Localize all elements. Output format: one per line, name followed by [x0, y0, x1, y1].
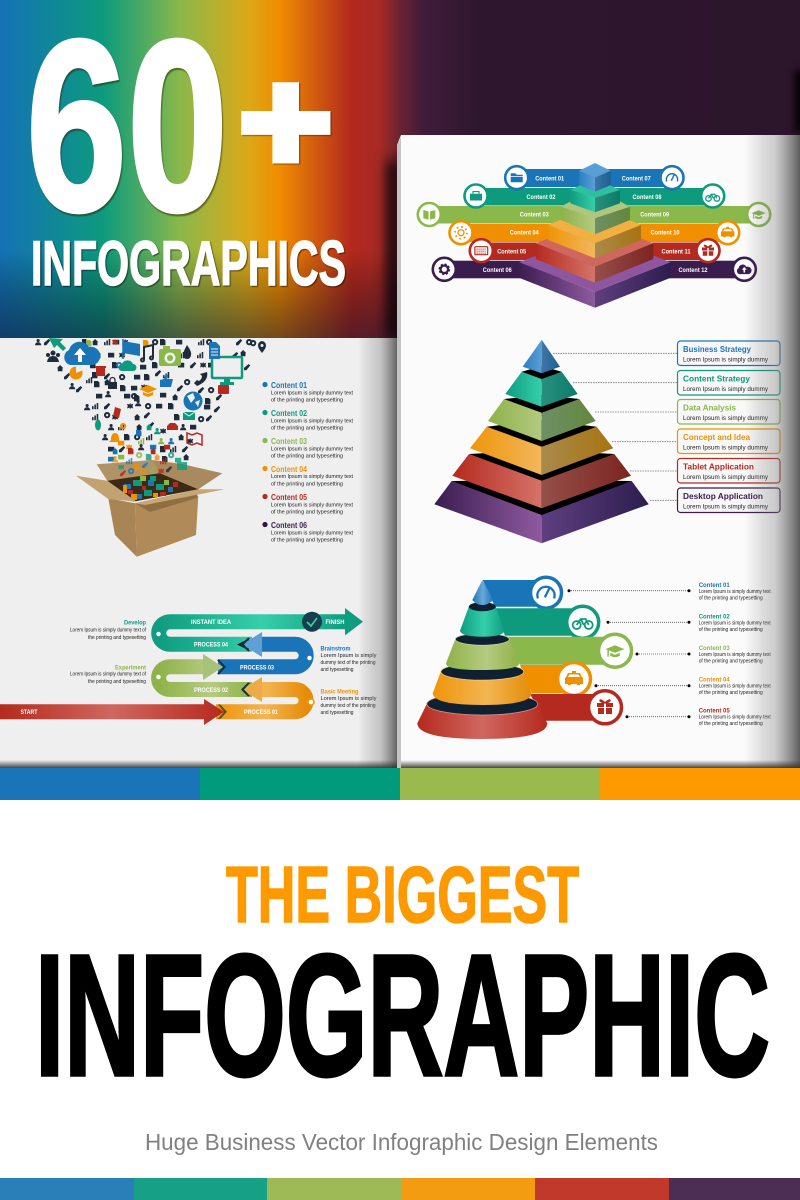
text: experiment: Lorem Ipsum is simply dummy text of — [70, 672, 147, 678]
icon: flag — [123, 339, 140, 359]
icon: book — [113, 407, 121, 418]
label: business strategy: Lorem Ipsum is simply dummy — [683, 356, 769, 364]
icon: phone — [194, 372, 207, 386]
text: experiment: the printing and typesetting — [88, 679, 146, 685]
text: brainstrom: and typesetting — [320, 667, 354, 673]
text: basic meeting: and typesetting — [320, 710, 354, 716]
legend item 04: Content 04 — [271, 465, 307, 474]
badge band: green — [505, 634, 632, 667]
band labels — [483, 176, 708, 274]
label: desktop application: Desktop Application — [683, 491, 763, 501]
heading: plus: + — [239, 41, 332, 202]
icon: gift — [95, 366, 106, 376]
cone layer: teal — [460, 602, 504, 637]
legend item 01: Content 01 — [271, 381, 307, 390]
badge band: red — [530, 691, 622, 724]
label: business strategy: Business Strategy — [683, 344, 751, 354]
panel: header gradient — [0, 0, 800, 340]
legend item 05: of the printing and typesetting — [271, 510, 343, 516]
text: basic meeting: dummy text of the printing — [320, 703, 376, 709]
text: cone content 03: of the printing and typesetting — [699, 658, 763, 664]
bands and icon badges left and right — [418, 166, 770, 281]
legend item 03: of the printing and typesetting — [271, 454, 343, 460]
subtitle: Huge Business Vector Infographic Design Elements — [145, 1129, 658, 1155]
label: tablet application — [678, 458, 780, 483]
legend item 02 — [262, 409, 353, 432]
color bar: bottom — [0, 1178, 800, 1200]
pyramid layer: red — [452, 454, 631, 508]
flow labels: PROCESS 02 — [194, 687, 228, 694]
legend item 04: of the printing and typesetting — [271, 482, 343, 488]
flow band: start red arrow — [0, 699, 224, 725]
flow labels — [20, 619, 345, 716]
text: experiment — [70, 664, 147, 685]
icon: drop — [183, 345, 191, 359]
label: data analysis — [678, 400, 780, 424]
icon: camera — [159, 346, 181, 366]
label: desktop application: Lorem Ipsum is simply dummy — [683, 504, 769, 510]
text: brainstrom: Lorem Ipsum is simply — [320, 653, 377, 659]
flow band: meeting orange — [216, 677, 306, 712]
icon: map — [187, 433, 202, 445]
legend item 04 — [262, 465, 353, 488]
flow band: develop teal — [159, 608, 363, 644]
icon: car — [167, 423, 178, 430]
icon cloud funnel — [35, 338, 266, 462]
legend item 06 — [262, 521, 353, 544]
label: concept and idea — [678, 429, 780, 454]
step layer: blue cube — [579, 163, 611, 192]
legend item 06: of the printing and typesetting — [271, 538, 343, 544]
text: cone content 05: Lorem Ipsum is simply dummy text — [699, 714, 771, 720]
legend item 02: Lorem Ipsum is simply dummy text — [271, 418, 353, 424]
text: cone content 02 — [699, 614, 771, 633]
label: business strategy — [678, 341, 780, 366]
band labels: Content 09 — [640, 212, 670, 218]
flow band: brainstorm blue — [218, 632, 306, 667]
icon: small cloud — [118, 360, 136, 371]
text: brainstrom — [320, 646, 377, 673]
label: concept and idea: Concept and Idea — [683, 432, 750, 442]
text: develop: the printing and typesetting — [88, 635, 146, 641]
label: desktop application — [678, 488, 780, 512]
falling icons over the box — [112, 452, 187, 476]
text: basic meeting — [320, 688, 377, 716]
icon: lock — [108, 378, 117, 389]
band labels: Content 12 — [678, 268, 708, 274]
legend item 06: Content 06 — [271, 521, 307, 530]
text: experiment: Experiment — [115, 664, 147, 672]
band labels: Content 04 — [510, 230, 539, 236]
label: content strategy — [678, 370, 780, 395]
chart: snake process flow — [0, 608, 377, 725]
legend item 02: Content 02 — [271, 409, 307, 418]
legend item 05: Lorem Ipsum is simply dummy text — [271, 502, 353, 508]
icon: music notes — [141, 345, 153, 362]
cone layer: orange — [433, 663, 532, 705]
text: brainstrom: Brainstrom — [320, 646, 351, 652]
label: content strategy: Content Strategy — [683, 374, 750, 384]
label: data analysis: Data Analysis — [683, 402, 736, 412]
icon: people — [46, 350, 60, 362]
text: basic meeting: Lorem Ipsum is simply — [320, 696, 377, 702]
heading: infographics: INFOGRAPHICS — [31, 229, 346, 299]
flow connector nodes — [156, 631, 314, 705]
legend item 03: Content 03 — [271, 437, 307, 446]
text: cone content 03: Lorem Ipsum is simply dummy text — [699, 652, 771, 658]
icon: monitor — [212, 357, 242, 385]
band labels: Content 05 — [497, 250, 527, 256]
band labels: Content 02 — [526, 195, 556, 201]
label: concept and idea: Lorem Ipsum is simply dummy — [683, 444, 769, 452]
legend item 05: Content 05 — [271, 493, 307, 502]
step layer: teal — [570, 178, 620, 212]
pyramid black separators — [452, 366, 632, 518]
band labels: Content 01 — [535, 176, 565, 182]
chart: stepped isometric pyramid — [418, 163, 770, 308]
text: cone content 01: Content 01 — [699, 583, 730, 589]
panel: left page — [0, 330, 398, 768]
icon: mouse — [95, 420, 101, 430]
text: basic meeting: Basic Meeting — [320, 688, 359, 696]
step layer: red — [536, 220, 653, 283]
icon: graduation cap — [139, 385, 157, 397]
text: cone content 02: Content 02 — [699, 614, 730, 620]
text: cone content 04: Lorem Ipsum is simply dummy text — [699, 683, 771, 689]
chart: cone stack with badges — [417, 577, 771, 739]
flow labels: START — [20, 709, 38, 716]
text: cone content 01 — [699, 583, 771, 602]
icon: red case — [218, 385, 229, 394]
pyramid layer: orange — [470, 427, 613, 475]
text: cone content 03: Content 03 — [699, 646, 730, 652]
pyramid layer: teal — [505, 372, 578, 407]
text: cone content 04 — [699, 677, 771, 696]
step layer: purple — [519, 233, 671, 308]
pyramid layer: green — [488, 399, 596, 441]
text: cone content 01: of the printing and typesetting — [699, 596, 763, 602]
legend item 01: Lorem Ipsum is simply dummy text — [271, 390, 353, 396]
dashed leader lines — [553, 353, 677, 500]
flow labels: FINISH — [326, 619, 345, 626]
text: brainstrom: dummy text of the printing — [320, 660, 376, 666]
legend item 05 — [262, 493, 353, 516]
flow band: experiment green — [159, 654, 252, 690]
icon: open cardboard box — [76, 452, 225, 557]
heading: the biggest: THE BIGGEST — [226, 850, 579, 939]
panel: right page — [397, 135, 800, 768]
chart: layered pyramid with labels — [434, 340, 780, 543]
text: cone content 03 — [699, 646, 771, 664]
legend: content list — [262, 381, 353, 544]
cone layer: blue tip — [472, 580, 493, 605]
text: cone content 02: Lorem Ipsum is simply dummy text — [699, 620, 771, 626]
icon: pin — [258, 341, 266, 353]
text: cone content 05: Content 05 — [699, 708, 730, 714]
pyramid layer: purple — [434, 481, 649, 543]
text: cone content 01: Lorem Ipsum is simply dummy text — [699, 589, 771, 595]
badge band: blue — [483, 577, 562, 608]
label: tablet application: Tablet Application — [683, 462, 754, 472]
text: cone content 02: of the printing and typesetting — [699, 627, 763, 633]
icon: globe — [184, 392, 202, 410]
icon: pie — [70, 366, 82, 380]
legend item 04: Lorem Ipsum is simply dummy text — [271, 474, 353, 480]
step layer: green — [561, 188, 630, 234]
icon: finish check — [302, 612, 322, 632]
cone layer: red — [417, 693, 547, 739]
icon: large cloud upload — [64, 342, 100, 365]
text: develop: Develop — [124, 620, 146, 626]
icon: thumbs up — [160, 374, 173, 387]
band labels: Content 06 — [483, 268, 512, 274]
text: develop — [70, 620, 147, 641]
text: cone content 04: of the printing and typesetting — [699, 690, 763, 696]
label: data analysis: Lorem Ipsum is simply dummy — [683, 415, 769, 422]
cone layer: green — [446, 633, 519, 670]
label: content strategy: Lorem Ipsum is simply dummy — [683, 386, 769, 393]
text: cone content 05: of the printing and typesetting — [699, 721, 763, 727]
icon: arrow cursor — [49, 338, 66, 351]
flow labels: PROCESS 04 — [194, 642, 228, 648]
arrow tip shadows — [217, 638, 250, 719]
band labels: Content 11 — [662, 250, 691, 256]
flow labels: PROCESS 03 — [240, 664, 274, 671]
text: develop: Lorem Ipsum is simply dummy text of — [70, 628, 147, 634]
icon: document — [209, 342, 220, 359]
flow labels: INSTANT IDEA — [191, 619, 231, 626]
legend item 02: of the printing and typesetting — [271, 426, 343, 432]
band labels: Content 07 — [622, 176, 651, 182]
flow labels: PROCESS 01 — [244, 709, 278, 716]
icon: bell — [109, 433, 121, 442]
legend item 06: Lorem Ipsum is simply dummy text — [271, 530, 353, 536]
legend item 01: of the printing and typesetting — [271, 398, 343, 404]
text: cone content 04: Content 04 — [699, 677, 730, 683]
dotted leaders — [569, 591, 689, 717]
badge band: teal — [495, 606, 599, 638]
legend item 03 — [262, 437, 353, 460]
badge band: orange — [520, 662, 590, 696]
icon: mail — [183, 412, 195, 420]
step layer: orange — [548, 205, 641, 258]
legend item 01 — [262, 381, 353, 404]
band labels: Content 10 — [650, 230, 680, 236]
pyramid layer: blue tip — [523, 340, 560, 373]
band labels: Content 08 — [632, 195, 662, 201]
text: cone content 05 — [699, 708, 771, 727]
band labels: Content 03 — [520, 212, 549, 218]
color bar: top — [0, 768, 800, 800]
label: tablet application: Lorem Ipsum is simply dummy — [683, 474, 769, 481]
legend item 03: Lorem Ipsum is simply dummy text — [271, 446, 353, 452]
